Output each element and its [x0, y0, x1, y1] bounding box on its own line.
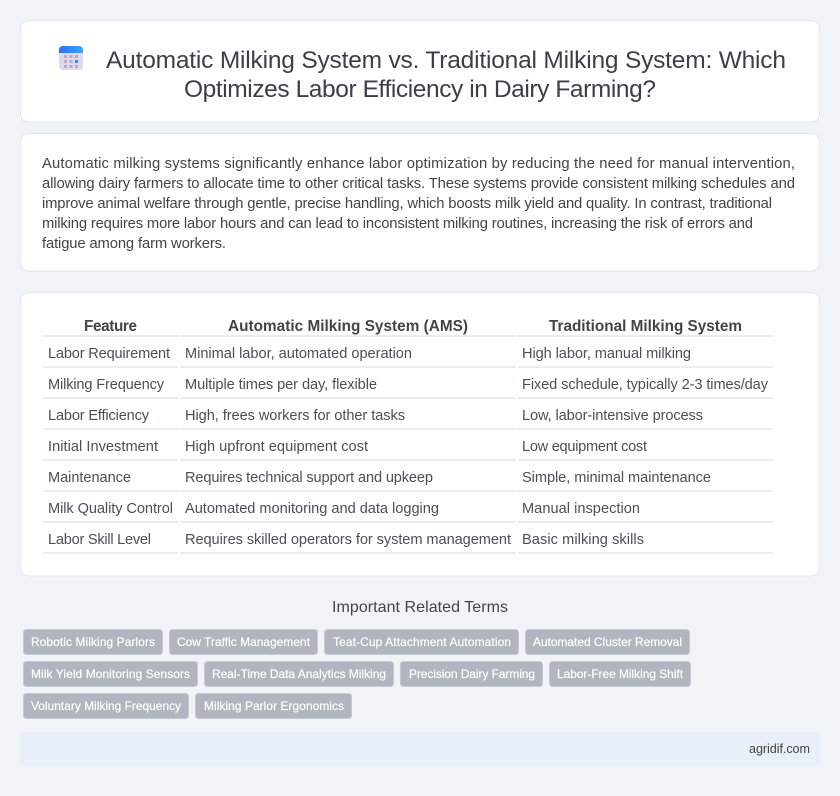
row: labor requirement: Labor Requirement — [48, 346, 170, 362]
paragraph: fatigue among farm workers. — [42, 236, 226, 252]
table header: Traditional Milking System — [549, 318, 742, 335]
table header: Feature — [84, 318, 137, 335]
tag — [196, 694, 352, 718]
row: labor efficiency: High, frees workers for other tasks — [185, 408, 405, 424]
tag — [550, 662, 690, 686]
paragraph: allowing dairy farmers to allocate time to other critical tasks. These systems provide consistent milking schedules and — [42, 176, 795, 192]
related term tags — [24, 630, 690, 718]
row: labor efficiency — [48, 408, 703, 424]
title — [106, 47, 786, 103]
footer: agridif.com — [749, 742, 810, 756]
tag — [24, 694, 188, 718]
row: milking frequency: Milking Frequency — [48, 377, 165, 393]
tag: Teat-Cup Attachment Automation — [333, 635, 511, 649]
tag: Labor-Free Milking Shift — [557, 667, 684, 681]
paragraph: improve animal welfare through gentle, precise handling, which boosts milk yield and quality. In contrast, traditional — [42, 196, 772, 212]
paragraph — [42, 156, 795, 252]
table header — [84, 318, 742, 335]
table header: Automatic Milking System (AMS) — [228, 318, 468, 335]
row: milking frequency — [48, 377, 769, 393]
tag: Milking Parlor Ergonomics — [204, 699, 344, 713]
footer — [20, 732, 820, 766]
tag: Milk Yield Monitoring Sensors — [31, 667, 190, 681]
row: milk quality control: Manual inspection — [522, 501, 640, 517]
tag: Robotic Milking Parlors — [31, 635, 155, 649]
row: labor skill level: Basic milking skills — [522, 532, 644, 548]
row: labor requirement: Minimal labor, automated operation — [185, 346, 412, 362]
tag — [400, 662, 542, 686]
row: initial investment: Low equipment cost — [522, 439, 647, 455]
row: initial investment: Initial Investment — [48, 439, 158, 455]
row: milk quality control: Milk Quality Control — [48, 501, 173, 517]
row: maintenance: Maintenance — [48, 470, 131, 486]
row: labor requirement — [48, 346, 691, 362]
panel: comparison table — [20, 292, 820, 576]
icon: calendar — [59, 46, 83, 70]
row: labor skill level: Requires skilled operators for system management — [185, 532, 511, 548]
tag — [204, 662, 394, 686]
row: labor skill level — [48, 532, 644, 548]
tag: Real-Time Data Analytics Milking — [212, 667, 386, 681]
row: maintenance: Requires technical support and upkeep — [185, 470, 433, 486]
row: milking frequency: Multiple times per day, flexible — [185, 377, 377, 393]
tag — [170, 630, 318, 654]
row: milk quality control: Automated monitoring and data logging — [185, 501, 439, 517]
panel: summary text — [20, 134, 820, 271]
row: labor efficiency: Labor Efficiency — [48, 408, 150, 424]
title: Automatic Milking System vs. Traditional Milking System: Which — [106, 47, 786, 74]
row: labor skill level: Labor Skill Level — [48, 532, 151, 548]
row: labor efficiency: Low, labor-intensive process — [522, 408, 703, 424]
row: milking frequency: Fixed schedule, typically 2-3 times/day — [522, 377, 769, 393]
row: labor requirement: High labor, manual milking — [522, 346, 691, 362]
tag — [24, 662, 198, 686]
tag — [324, 630, 518, 654]
tag: Automated Cluster Removal — [533, 635, 682, 649]
row: milk quality control — [48, 501, 640, 517]
panel: header — [20, 20, 820, 122]
row: maintenance: Simple, minimal maintenance — [522, 470, 711, 486]
tag — [526, 630, 690, 654]
title: Optimizes Labor Efficiency in Dairy Farming? — [184, 76, 656, 103]
paragraph: Automatic milking systems significantly enhance labor optimization by reducing the need for manual intervention, — [42, 156, 795, 172]
heading: related terms: Important Related Terms — [332, 599, 508, 616]
tag: Cow Traffic Management — [177, 635, 311, 649]
row: maintenance — [48, 470, 711, 486]
tag: Precision Dairy Farming — [409, 667, 535, 681]
row: initial investment: High upfront equipment cost — [185, 439, 368, 455]
tag — [24, 630, 162, 654]
row: initial investment — [48, 439, 647, 455]
paragraph: milking requires more labor hours and can lead to inconsistent milking routines, increasing the risk of errors and — [42, 216, 753, 232]
tag: Voluntary Milking Frequency — [31, 699, 181, 713]
